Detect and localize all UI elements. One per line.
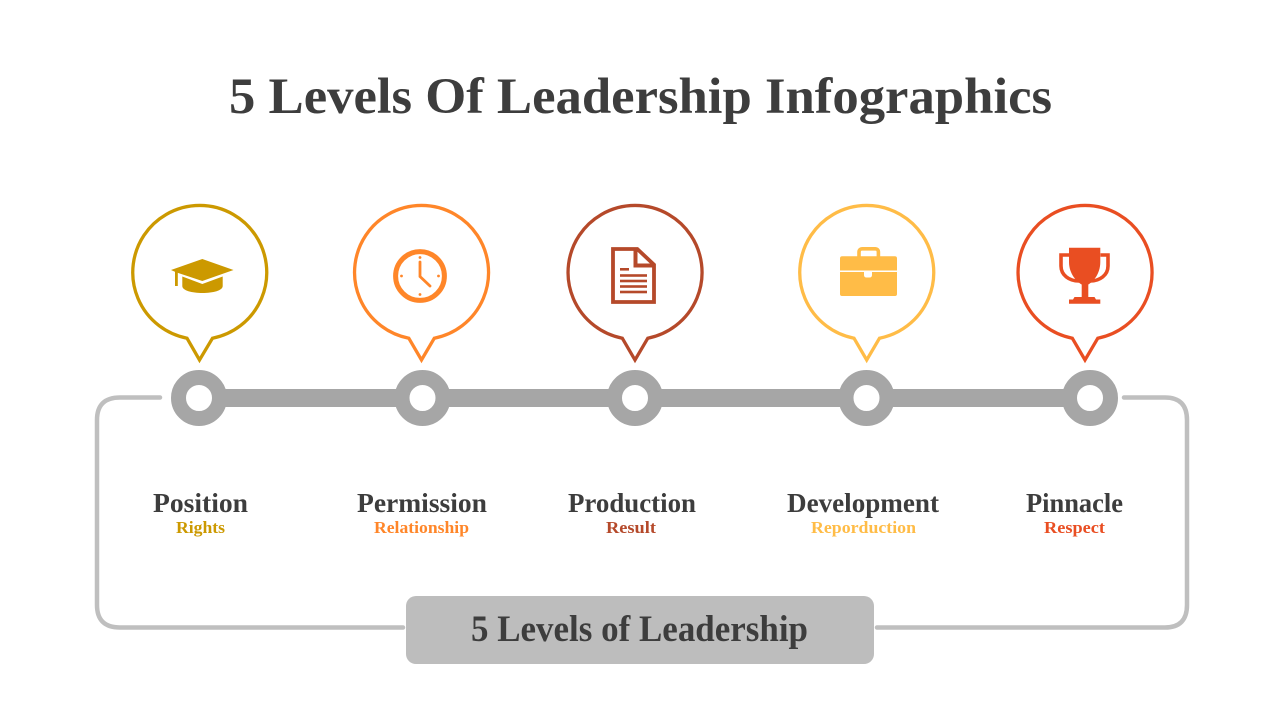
label: position — [153, 488, 248, 537]
icon: clock — [396, 252, 444, 300]
subheading: reporduction: Reporduction — [811, 518, 917, 537]
heading: production: Production — [568, 488, 696, 518]
icon: trophy — [1061, 248, 1108, 304]
timeline bar — [199, 389, 1090, 407]
level 2: permission — [355, 205, 489, 537]
heading: pinnacle: Pinnacle — [1026, 488, 1123, 518]
level 3: production — [568, 205, 702, 537]
speech bubble: position — [133, 205, 267, 360]
label: production — [568, 488, 696, 537]
speech bubble: development — [800, 205, 934, 360]
heading: position: Position — [153, 488, 248, 518]
subheading: relationship: Relationship — [374, 518, 469, 537]
level 1: position — [133, 205, 267, 537]
subheading: respect: Respect — [1044, 518, 1105, 537]
connector frame — [97, 398, 1187, 628]
bottom banner — [406, 596, 874, 664]
icon: graduation cap — [171, 259, 234, 293]
label: development — [787, 488, 939, 537]
banner box — [406, 596, 874, 664]
label: permission — [357, 488, 487, 537]
heading: development: Development — [787, 488, 939, 518]
icon: document — [613, 249, 654, 302]
icon: briefcase — [840, 249, 897, 296]
subheading: rights: Rights — [176, 518, 225, 537]
title: 5 Levels Of Leadership Infographics — [229, 69, 1052, 125]
speech bubble: pinnacle — [1018, 205, 1152, 360]
label: pinnacle — [1026, 488, 1123, 537]
timeline nodes — [178, 378, 1110, 418]
heading: permission: Permission — [357, 488, 487, 518]
banner text: 5 Levels of Leadership — [471, 609, 808, 650]
level 5: pinnacle — [1018, 205, 1152, 537]
speech bubble: production — [568, 205, 702, 360]
subheading: result: Result — [606, 518, 656, 537]
speech bubble: permission — [355, 205, 489, 360]
level 4: development — [787, 205, 939, 537]
